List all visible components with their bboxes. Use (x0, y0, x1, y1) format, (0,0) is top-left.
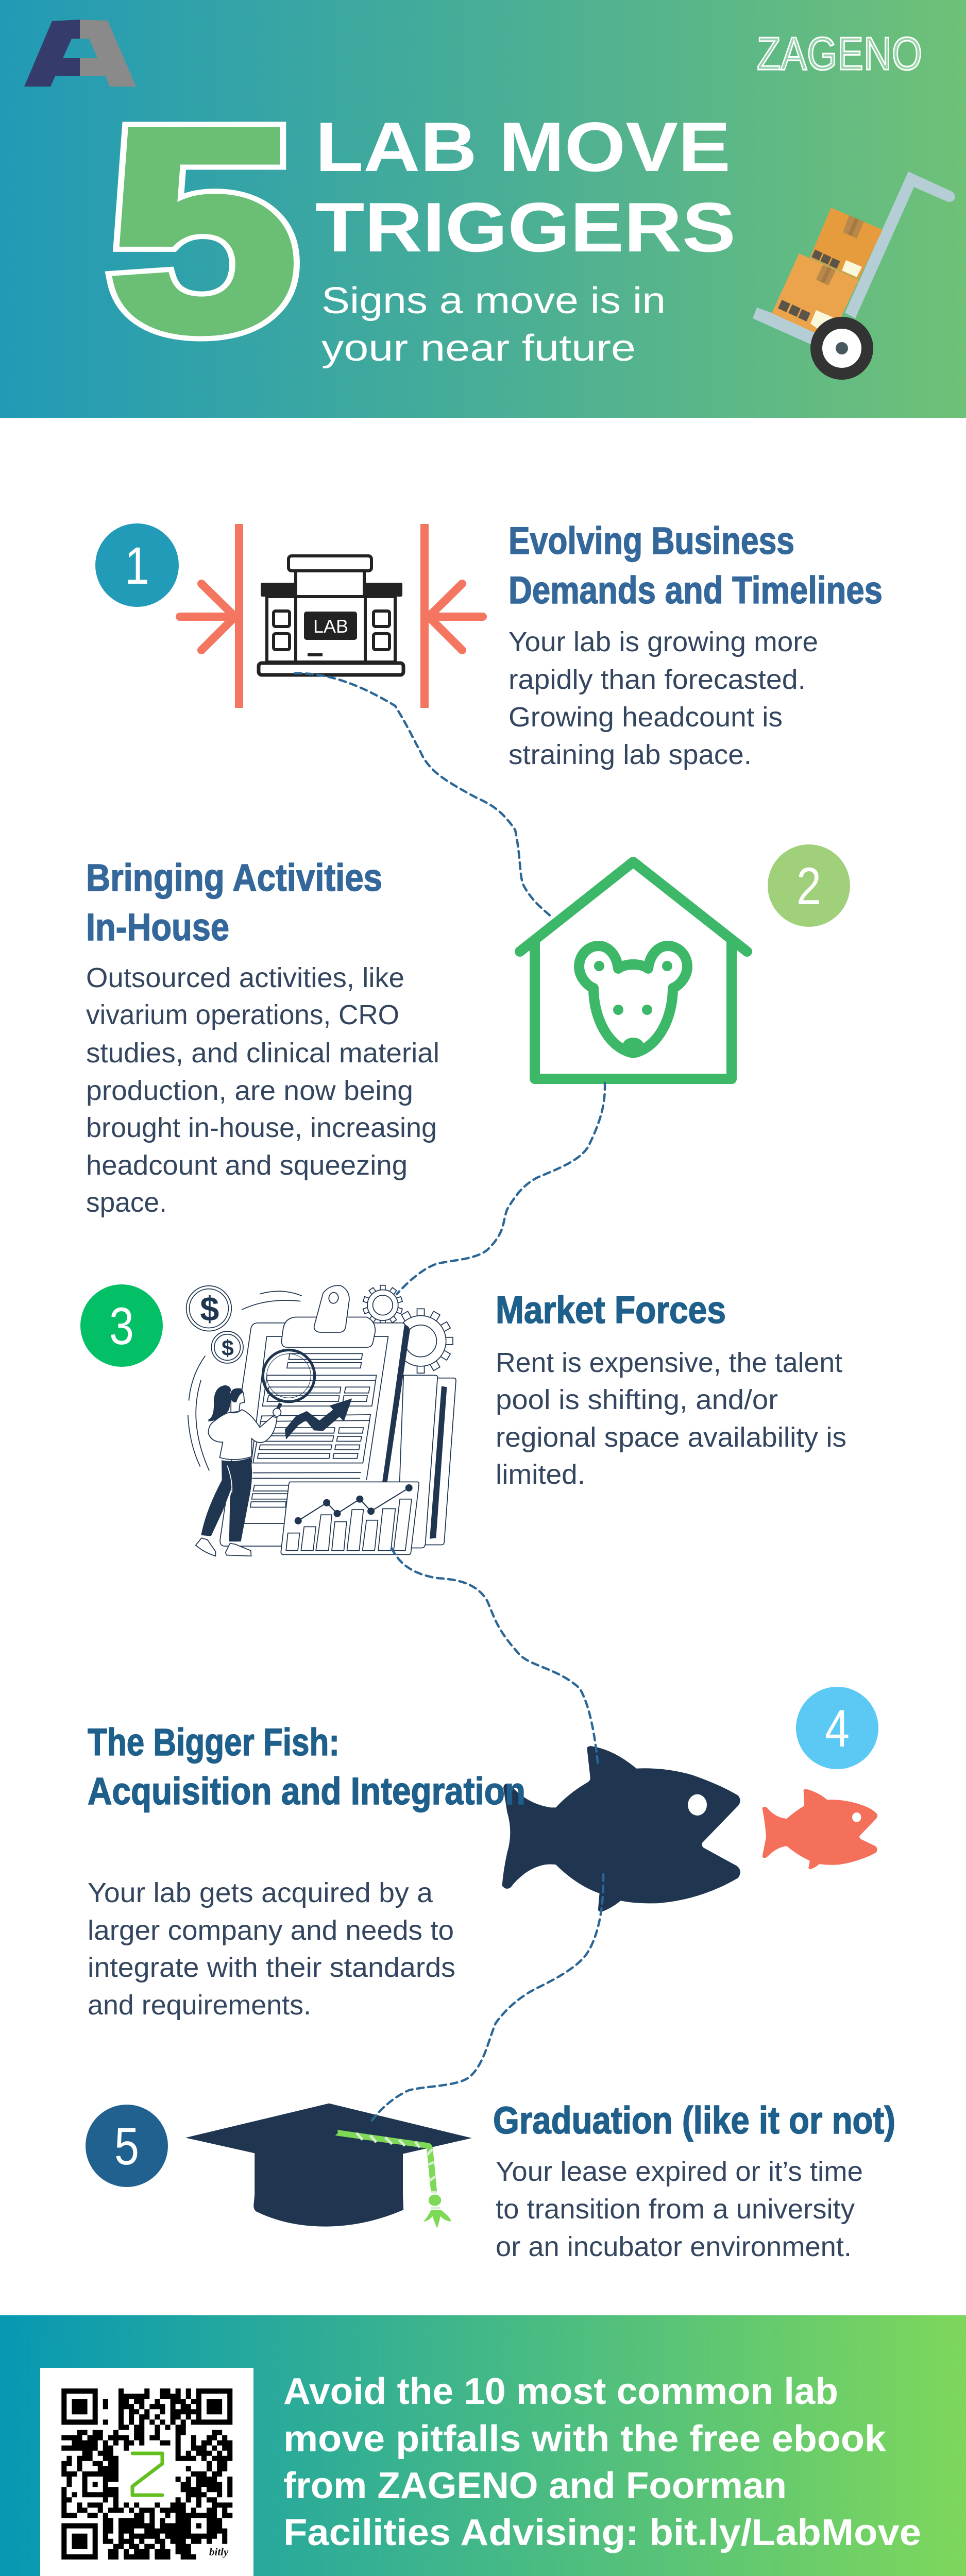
heading: The Bigger Fish: (88, 1721, 340, 1764)
body text: Outsourced activities, like (86, 962, 404, 993)
number badge 1: 1 (125, 536, 149, 595)
body text (88, 1877, 455, 2021)
title (315, 108, 736, 266)
title: TRIGGERS (315, 188, 736, 266)
connector: step 4 to step 5 (369, 1874, 603, 2124)
big number 5: 5 (107, 69, 298, 391)
connector: step 1 to step 2 (295, 673, 552, 917)
clipboard (220, 1285, 410, 1546)
panel: step 4 (88, 1687, 878, 2021)
body text: straining lab space. (509, 739, 752, 770)
heading: Graduation (like it or not) (493, 2099, 895, 2142)
panel: step 3 (80, 1284, 846, 1556)
number badge 4 (796, 1687, 878, 1769)
icon: woman analysing market report (187, 1285, 456, 1556)
magnifier (263, 1350, 315, 1412)
body text (86, 962, 439, 1218)
subtitle: your near future (321, 328, 636, 369)
body text (509, 626, 818, 770)
heading (509, 519, 883, 612)
call to action text: Facilities Advising: bit.ly/LabMove (283, 2512, 921, 2553)
number badge 3 (80, 1284, 163, 1367)
coins: $ (222, 1336, 234, 1361)
heading: Bringing Activities (86, 856, 382, 899)
body text (496, 2156, 863, 2262)
body text: production, are now being (86, 1075, 413, 1106)
number badge 5 (86, 2105, 168, 2187)
body text: limited. (496, 1459, 585, 1490)
body text: Your lab gets acquired by a (88, 1877, 433, 1908)
panel: step 1 (95, 519, 883, 770)
call to action text (283, 2371, 921, 2553)
number badge 2: 2 (796, 857, 821, 916)
coins (187, 1286, 243, 1363)
coins: $ (200, 1290, 219, 1328)
body text: or an incubator environment. (496, 2231, 852, 2262)
heading: In-House (86, 906, 229, 948)
icon: mouse in house (520, 862, 747, 1079)
body text: to transition from a university (496, 2194, 855, 2225)
body text: Your lab is growing more (509, 626, 818, 657)
heading: Market Forces (496, 1289, 726, 1331)
icon: AA logo (24, 20, 136, 87)
icon: lab squeezed by arrows: LAB (313, 616, 348, 637)
body text: brought in-house, increasing (86, 1112, 437, 1143)
body text: and requirements. (88, 1990, 311, 2021)
body text: headcount and squeezing (86, 1150, 408, 1181)
heading: Demands and Timelines (509, 569, 883, 612)
body text (496, 1347, 846, 1490)
subtitle: Signs a move is in (321, 280, 666, 321)
panel: step 5 (86, 2099, 895, 2262)
back pages (397, 1375, 456, 1548)
number badge 1 (95, 523, 179, 607)
title: LAB MOVE (315, 108, 731, 186)
heading (86, 856, 382, 948)
chart panel (281, 1482, 419, 1554)
panel: footer banner (0, 2315, 966, 2576)
body text: Your lease expired or it’s time (496, 2156, 863, 2187)
woman (196, 1385, 281, 1556)
heading: Evolving Business (509, 519, 794, 562)
number badge 2 (768, 844, 850, 927)
call to action text: from ZAGENO and Foorman (283, 2465, 787, 2506)
connector: step 3 to step 4 (392, 1548, 598, 1766)
heading (88, 1721, 526, 1812)
body text: Growing headcount is (509, 702, 783, 733)
icon: graduation cap (185, 2104, 472, 2228)
motion arcs (188, 1291, 302, 1471)
heading: Acquisition and Integration (88, 1770, 526, 1812)
subtitle (321, 280, 666, 369)
body text: rapidly than forecasted. (509, 664, 806, 695)
body text: studies, and clinical material (86, 1038, 439, 1069)
call to action text: Avoid the 10 most common lab (283, 2371, 838, 2412)
body text: larger company and needs to (88, 1915, 454, 1946)
QR code (40, 2368, 253, 2576)
icon: hand truck with boxes (753, 172, 955, 380)
gears (363, 1285, 453, 1373)
body text: space. (86, 1187, 167, 1218)
number badge 4: 4 (825, 1699, 850, 1758)
panel: step 2 (86, 844, 850, 1218)
body text: vivarium operations, CRO (86, 999, 399, 1030)
number badge 3: 3 (109, 1297, 134, 1355)
logo: ZAGENO: ZAGENO (757, 28, 922, 80)
number badge 5: 5 (114, 2117, 139, 2176)
call to action text: move pitfalls with the free ebook (283, 2418, 887, 2460)
report rows (250, 1353, 377, 1507)
icon: big fish chasing small fish (502, 1746, 877, 1912)
body text: pool is shifting, and/or (496, 1384, 778, 1415)
connector: step 2 to step 3 (397, 1083, 605, 1294)
body text: regional space availability is (496, 1422, 846, 1453)
trend arrow (285, 1398, 352, 1439)
body text: integrate with their standards (88, 1952, 455, 1983)
body text: Rent is expensive, the talent (496, 1347, 842, 1378)
icon: lab squeezed by arrows (180, 524, 483, 708)
big number 5: 5 (107, 69, 298, 391)
panel: header banner (0, 0, 966, 418)
QR code: bitly (209, 2546, 229, 2558)
